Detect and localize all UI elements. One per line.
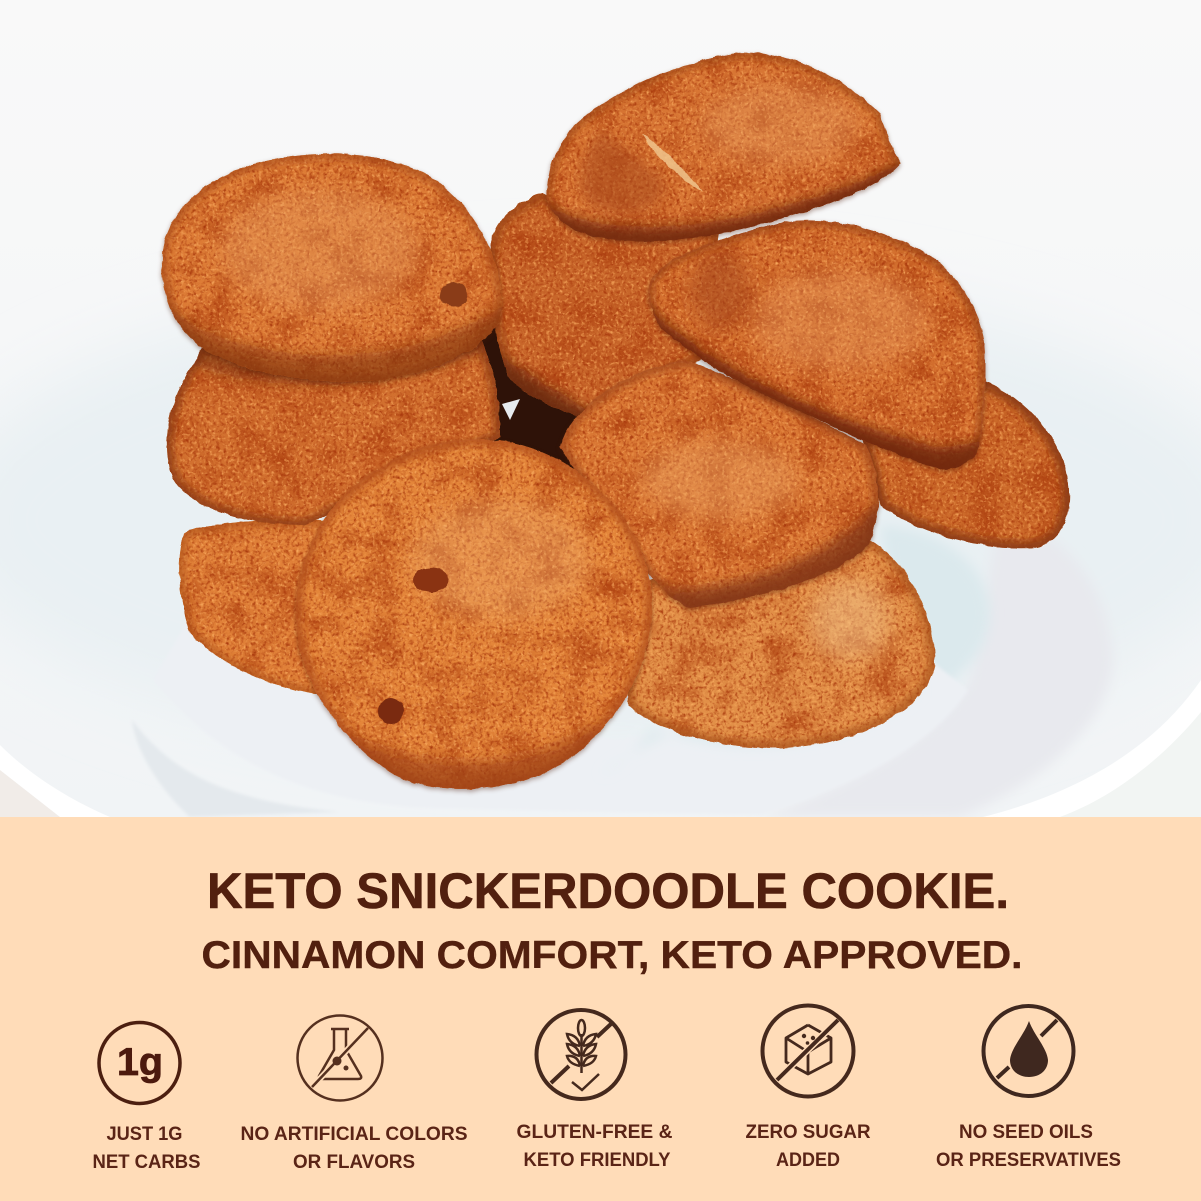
cookie: centre back bbox=[490, 193, 720, 430]
cookie: left middle bbox=[166, 340, 500, 526]
icon: crossed-out oil drop bbox=[984, 1006, 1074, 1096]
blue plate well right bbox=[880, 525, 990, 690]
white bowl bbox=[0, 280, 1201, 817]
label: GLUTEN-FREE & bbox=[516, 1121, 672, 1143]
plate shadow band bbox=[132, 720, 340, 817]
benefit: 1g net carbs bbox=[92, 1022, 200, 1173]
cookie: top bbox=[540, 53, 905, 255]
icon: crossed-out sugar cube bbox=[762, 1006, 854, 1096]
label: ZERO SUGAR bbox=[746, 1121, 870, 1143]
cookie: left top bbox=[150, 154, 510, 400]
cookie: front bbox=[296, 439, 652, 800]
dark gap between cookies bbox=[465, 315, 610, 475]
cream text panel bbox=[0, 817, 1201, 1201]
benefit: 1g net carbs: NET CARBS bbox=[92, 1151, 200, 1173]
bowl white rim bbox=[983, 680, 1201, 817]
cookie: far right back bbox=[860, 382, 1069, 548]
benefit: gluten-free bbox=[516, 1010, 672, 1171]
label: NO SEED OILS bbox=[959, 1121, 1093, 1143]
subtitle: CINNAMON COMFORT, KETO APPROVED. bbox=[202, 934, 1022, 977]
cookie: right middle bbox=[640, 220, 990, 490]
plate blue area under cookies bbox=[600, 680, 920, 775]
cookie: bottom right bbox=[625, 540, 935, 748]
icon: crossed-out wheat with check bbox=[536, 1010, 626, 1099]
label: NO ARTIFICIAL COLORS bbox=[240, 1123, 468, 1145]
benefit: no artificial colors bbox=[240, 1016, 468, 1173]
table corners bbox=[0, 770, 60, 817]
benefit: no seed oils bbox=[936, 1006, 1121, 1171]
photo: cookies in a white bowl bbox=[0, 0, 1201, 817]
label: JUST 1G bbox=[106, 1123, 182, 1145]
benefit: no artificial colors: OR FLAVORS bbox=[293, 1151, 415, 1173]
plate bbox=[153, 600, 968, 815]
icon: 1g circle bbox=[99, 1022, 180, 1104]
icon: 1g circle: 1g bbox=[117, 1041, 163, 1084]
title: KETO SNICKERDOODLE COOKIE. bbox=[207, 863, 1009, 919]
benefit: no seed oils: OR PRESERVATIVES bbox=[936, 1149, 1121, 1171]
cookie: centre bbox=[560, 360, 890, 625]
benefit: gluten-free: KETO FRIENDLY bbox=[524, 1149, 670, 1171]
icon: crossed-out flask bbox=[298, 1016, 382, 1100]
benefit: zero sugar: ADDED bbox=[776, 1149, 840, 1171]
cookie: lower left bbox=[178, 520, 323, 694]
bowl inner wall right bbox=[760, 510, 1113, 817]
benefit: zero sugar bbox=[746, 1006, 870, 1171]
